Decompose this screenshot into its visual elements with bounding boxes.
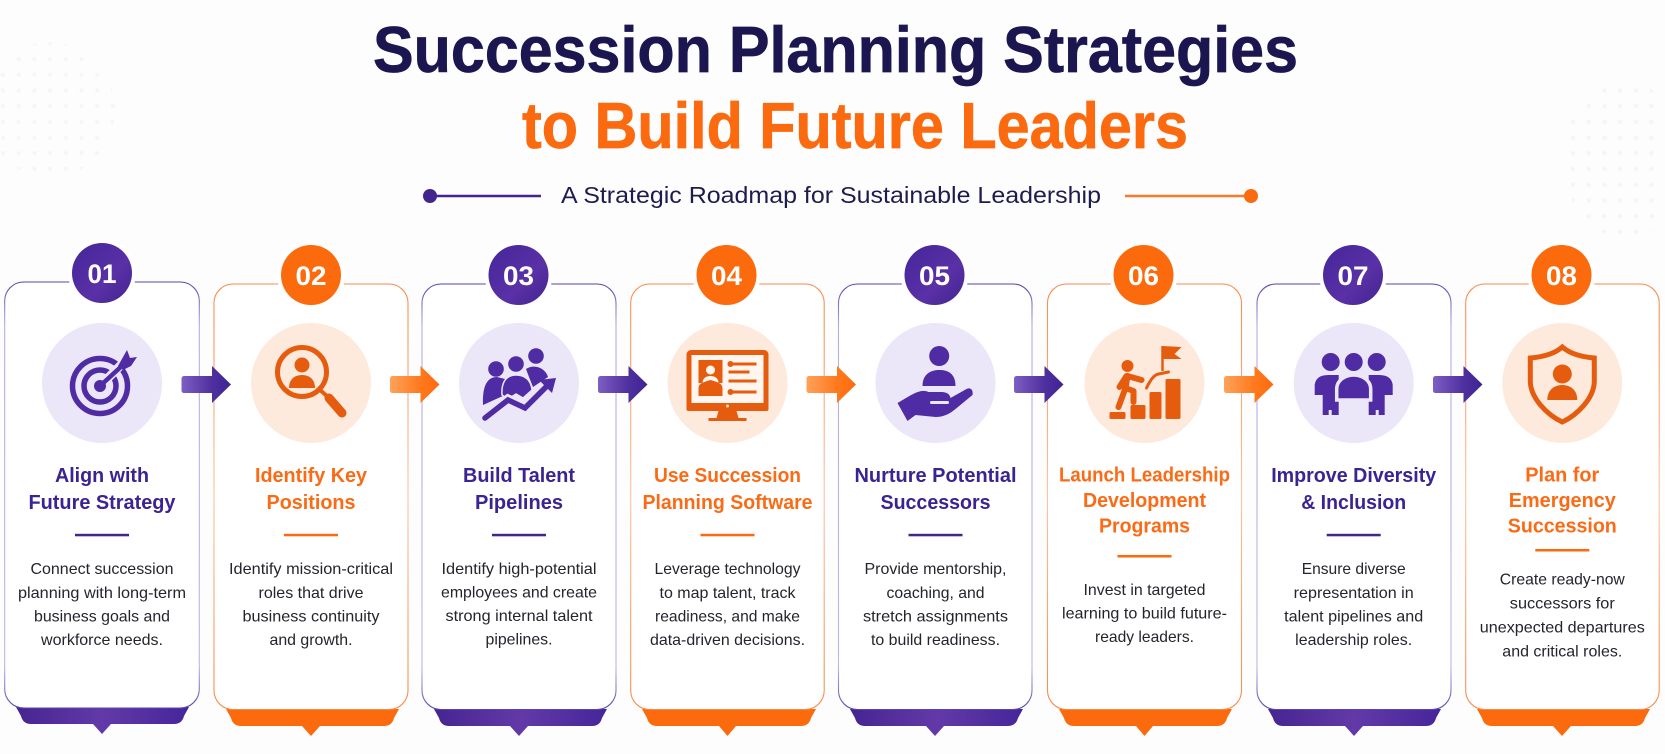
body text: data-driven decisions.	[650, 632, 805, 649]
body text: business goals and	[34, 608, 170, 626]
card frame	[631, 284, 824, 710]
number badge: 07	[1338, 261, 1368, 291]
panel: card 1	[5, 239, 199, 734]
body text	[863, 561, 1008, 649]
body text: Ensure diverse	[1302, 561, 1406, 578]
heading: Succession	[1508, 514, 1617, 538]
icon: climber on steps with flag	[1084, 323, 1204, 443]
card foot	[434, 709, 607, 736]
heading: & Inclusion	[1301, 491, 1406, 514]
body text: roles that drive	[258, 585, 364, 602]
panel: card 5	[838, 241, 1032, 736]
number badge	[900, 241, 968, 309]
card foot	[1059, 709, 1232, 736]
panel: card 2	[214, 241, 408, 736]
number badge: 05	[919, 261, 950, 291]
body text: Connect succession	[30, 561, 174, 578]
card frame	[422, 284, 616, 710]
heading: Emergency	[1509, 489, 1616, 512]
heading: Development	[1083, 489, 1206, 512]
body text: Identify high-potential	[442, 561, 596, 578]
arrow: card 4 to 5	[806, 366, 856, 403]
body text: strong internal talent	[446, 608, 593, 625]
icon: monitor with candidate profile	[668, 323, 788, 443]
icon: hand supporting person	[876, 323, 996, 443]
body text: readiness, and make	[655, 608, 800, 626]
card frame	[1257, 284, 1451, 710]
body text	[18, 561, 186, 649]
heading	[1271, 464, 1437, 514]
card foot	[1477, 709, 1650, 736]
heading	[642, 464, 812, 514]
card foot	[642, 709, 816, 736]
body text: business continuity	[242, 608, 380, 626]
heading: Align with	[55, 464, 149, 487]
panel: card 8	[1466, 241, 1659, 736]
panel: card 3	[422, 241, 616, 736]
body text: representation in	[1294, 585, 1414, 602]
number badge	[1319, 241, 1387, 309]
heading: Planning Software	[642, 491, 812, 514]
body text: employees and create	[441, 584, 597, 602]
heading: Launch Leadership	[1059, 464, 1230, 486]
card frame	[5, 282, 199, 708]
arrow: card 6 to 7	[1224, 366, 1274, 403]
title: Succession Planning Strategies	[373, 13, 1298, 86]
title: to Build Future Leaders	[522, 89, 1188, 162]
body text: to build readiness.	[871, 632, 1000, 649]
card foot	[226, 709, 399, 736]
arrow: card 7 to 8	[1433, 366, 1482, 403]
icon: target with arrow	[42, 323, 162, 443]
number badge	[692, 241, 760, 309]
body text	[1062, 582, 1227, 646]
number badge: 08	[1546, 261, 1577, 291]
subtitle with roadmap rules	[423, 182, 1258, 208]
heading	[1508, 464, 1617, 538]
card frame	[838, 284, 1032, 710]
icon: three people	[1294, 323, 1414, 443]
number badge: 01	[88, 259, 116, 289]
body text: pipelines.	[486, 632, 552, 648]
body text	[1480, 572, 1645, 660]
number badge: 04	[711, 261, 742, 291]
body text: ready leaders.	[1095, 629, 1194, 646]
heading	[463, 464, 575, 514]
body text: unexpected departures	[1480, 620, 1645, 636]
body text: Provide mentorship,	[864, 561, 1006, 578]
number badge: 03	[503, 261, 534, 291]
heading: Identify Key	[255, 464, 368, 487]
heading	[28, 464, 176, 514]
heading: Use Succession	[654, 464, 801, 487]
icon: team with growth arrow	[459, 323, 579, 443]
body text: planning with long-term	[18, 585, 186, 602]
body text: talent pipelines and	[1284, 608, 1423, 626]
heading: Successors	[880, 491, 990, 514]
icon: magnifier on person	[251, 323, 371, 443]
body text: leadership roles.	[1295, 632, 1412, 649]
heading: Nurture Potential	[854, 464, 1016, 487]
heading	[255, 464, 368, 514]
body text: Leverage technology	[654, 561, 801, 578]
card foot	[1268, 709, 1441, 736]
arrow: card 1 to 2	[182, 366, 231, 403]
heading	[854, 464, 1016, 514]
heading: Pipelines	[475, 491, 563, 514]
heading: Plan for	[1525, 464, 1599, 486]
heading: Positions	[266, 491, 356, 514]
heading: Programs	[1099, 514, 1190, 538]
body text: stretch assignments	[863, 608, 1008, 626]
number badge: 02	[296, 261, 326, 291]
body text: learning to build future-	[1062, 606, 1227, 622]
number badge: 06	[1128, 261, 1159, 291]
body text	[650, 561, 805, 649]
body text: and growth.	[270, 632, 352, 649]
card frame	[1466, 284, 1659, 710]
card foot	[850, 709, 1023, 736]
card foot	[16, 707, 189, 734]
heading	[1059, 464, 1230, 538]
body text: Invest in targeted	[1084, 582, 1206, 599]
body text: coaching, and	[886, 585, 984, 602]
arrow: card 5 to 6	[1014, 366, 1064, 403]
body text: Create ready-now	[1500, 572, 1625, 588]
number badge	[1528, 241, 1596, 309]
body text: to map talent, track	[660, 585, 796, 602]
number badge	[1110, 241, 1178, 309]
number badge	[277, 241, 345, 309]
body text: and critical roles.	[1502, 644, 1622, 660]
title	[373, 13, 1298, 162]
subtitle with roadmap rules: A Strategic Roadmap for Sustainable Leadership	[561, 182, 1101, 208]
panel: card 7	[1257, 241, 1451, 736]
card frame	[1048, 284, 1242, 710]
body text: successors for	[1510, 596, 1615, 612]
number badge	[484, 241, 552, 309]
body text	[441, 561, 597, 648]
number badge	[68, 239, 136, 307]
body text	[229, 561, 393, 649]
card frame	[214, 284, 408, 710]
panel: card 6	[1048, 241, 1242, 736]
body text: workforce needs.	[40, 632, 163, 649]
arrow: card 2 to 3	[390, 366, 440, 403]
icon: shield with person	[1502, 323, 1622, 443]
arrow: card 3 to 4	[598, 366, 648, 403]
heading: Build Talent	[463, 464, 575, 487]
heading: Improve Diversity	[1271, 464, 1437, 487]
body text: Identify mission-critical	[229, 561, 393, 578]
heading: Future Strategy	[28, 491, 176, 514]
body text	[1284, 561, 1423, 649]
panel: card 4	[631, 241, 824, 736]
